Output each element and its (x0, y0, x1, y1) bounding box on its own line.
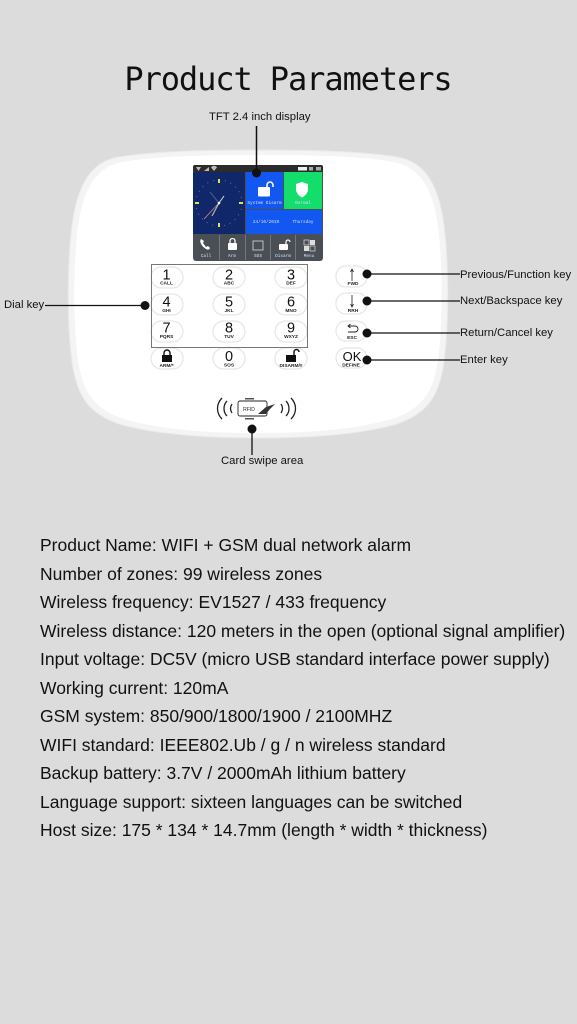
callout: next/backspace key (362, 295, 563, 307)
device panel (68, 150, 448, 438)
callout: return/cancel key (362, 327, 553, 339)
keypad keys: 0 (225, 349, 233, 365)
keypad keys: DEF (286, 280, 296, 286)
callout: TFT display (209, 111, 311, 178)
product parameter list: Language support: sixteen languages can be switched (40, 792, 462, 812)
callout: previous/function key (362, 269, 571, 281)
callout: dial key (4, 299, 150, 311)
product parameter list: Product Name: WIFI + GSM dual network alarm (40, 535, 411, 555)
date tile (246, 210, 322, 234)
date tile: Thursday (292, 220, 314, 225)
product parameter list: Number of zones: 99 wireless zones (40, 564, 322, 584)
function keys (336, 266, 367, 368)
function keys: FWD (348, 281, 359, 287)
callout: TFT display: TFT 2.4 inch display (209, 111, 311, 123)
keypad keys: 6 (287, 294, 295, 310)
callout: return/cancel key: Return/Cancel key (460, 327, 553, 339)
keypad keys: GHI (162, 308, 171, 314)
title: Product Parameters (124, 60, 453, 98)
date tile: 24/10/2019 (253, 220, 280, 225)
product parameter list: Working current: 120mA (40, 678, 229, 698)
system disarm tile: System Disarm (247, 201, 282, 206)
callout: enter key: Enter key (460, 354, 508, 366)
bottom menu: Menu (304, 254, 315, 259)
keypad outline box (152, 264, 308, 348)
keypad keys: ABC (224, 280, 235, 286)
bottom menu: Call (201, 254, 212, 259)
bottom menu (200, 235, 315, 260)
callout: previous/function key: Previous/Function key (460, 269, 571, 281)
keypad keys: SOS (224, 362, 235, 368)
clock face (193, 172, 245, 234)
bottom menu: Disarm (275, 254, 291, 259)
callout: dial key: Dial key (4, 299, 45, 311)
keypad keys: PQRS (160, 334, 174, 340)
product parameter list: WIFI standard: IEEE802.Ub / g / n wireless standard (40, 735, 446, 755)
keypad keys: 9 (287, 320, 295, 336)
callout: enter key (362, 354, 508, 366)
product parameter list: GSM system: 850/900/1800/1900 / 2100MHZ (40, 706, 392, 726)
callout: next/backspace key: Next/Backspace key (460, 295, 563, 307)
keypad keys: DISARM/# (280, 363, 303, 369)
product parameter list: Wireless frequency: EV1527 / 433 frequency (40, 592, 387, 612)
function keys: ESC (347, 335, 357, 341)
product parameter list: Input voltage: DC5V (micro USB standard interface power supply) (40, 649, 550, 669)
keypad keys: WXYZ (284, 334, 298, 340)
keypad keys: MNO (285, 308, 297, 314)
bottom menu: Arm (228, 254, 236, 259)
keypad keys: 3 (287, 268, 295, 284)
product parameter list (40, 535, 565, 840)
green shield tile: Normal (295, 201, 311, 206)
keypad keys: 7 (162, 320, 171, 336)
keypad keys: ARM/* (159, 363, 174, 369)
product parameter list: Wireless distance: 120 meters in the open (optional signal amplifier) (40, 621, 565, 641)
keypad keys: 5 (225, 294, 233, 310)
keypad keys: 1 (162, 268, 171, 284)
keypad keys: TUV (224, 334, 235, 340)
keypad keys (151, 267, 307, 369)
keypad keys: CALL (160, 280, 173, 286)
bottom menu: SOS (254, 254, 262, 259)
display screen (193, 165, 323, 261)
function keys: OK (343, 349, 362, 364)
product parameter list: Host size: 175 * 134 * 14.7mm (length * width * thickness) (40, 820, 487, 840)
icon: RFID card swipe: RFID (243, 407, 255, 413)
keypad keys: 2 (225, 268, 233, 284)
icon: RFID card swipe (218, 398, 296, 420)
keypad keys: 8 (225, 320, 233, 336)
function keys: RRH (348, 308, 359, 314)
callout: card swipe area (221, 424, 304, 467)
function keys: DEFINE (342, 362, 361, 368)
callout: card swipe area: Card swipe area (221, 455, 304, 467)
keypad keys: 4 (162, 294, 171, 310)
keypad keys: JKL (224, 308, 234, 314)
status bar (193, 165, 323, 172)
product parameter list: Backup battery: 3.7V / 2000mAh lithium battery (40, 763, 406, 783)
